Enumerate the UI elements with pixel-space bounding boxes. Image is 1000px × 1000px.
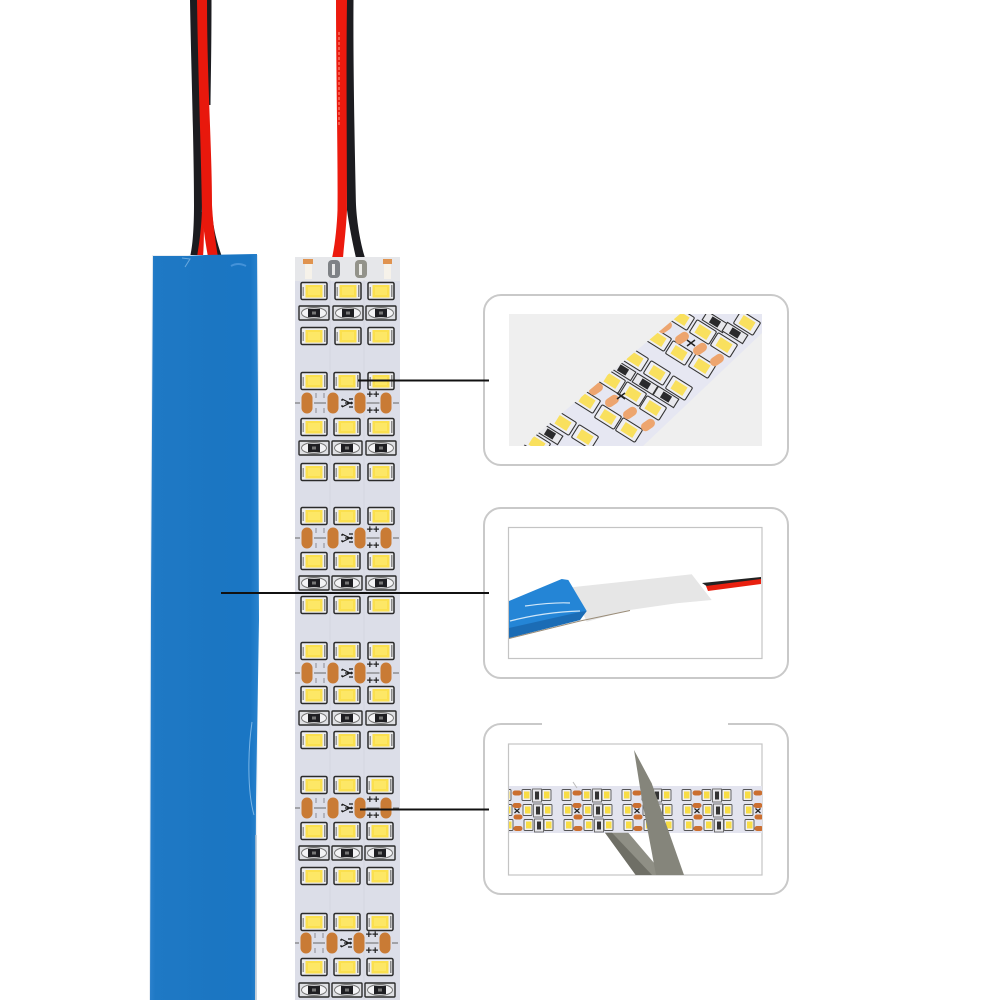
gap in panel top border bbox=[542, 721, 728, 727]
cut points with copper pads: ++ bbox=[366, 945, 378, 957]
horizontal LED strip bbox=[509, 786, 762, 833]
solder pads and wire ends bbox=[295, 257, 400, 281]
leader line: sleeve to panel two bbox=[221, 592, 489, 594]
wires: left pair to blue sleeve bbox=[190, 0, 222, 257]
photo frame bbox=[508, 528, 762, 658]
panel frame bbox=[484, 724, 788, 894]
leader line: strip to panel one bbox=[358, 380, 489, 382]
blue sleeve end bbox=[509, 579, 630, 638]
panel: cutting close-up bbox=[484, 721, 794, 894]
cut points with copper pads: ++ bbox=[367, 794, 379, 806]
scissors bbox=[573, 750, 684, 875]
cut points with copper pads: ++ bbox=[367, 675, 379, 687]
angled LED strip bbox=[524, 314, 762, 446]
LED and resistor rows bbox=[299, 282, 396, 997]
infographic canvas bbox=[149, 0, 789, 1000]
cut points with copper pads: ++ bbox=[367, 810, 379, 822]
strip circuit board bbox=[295, 257, 400, 1000]
cut points with copper pads: ++ bbox=[367, 405, 379, 417]
leader line: cut point to panel three bbox=[360, 808, 489, 810]
panel: silicone sleeve close-up bbox=[484, 508, 788, 678]
cut points with copper pads: ++ bbox=[367, 540, 379, 552]
cut points with copper pads: ++ bbox=[367, 524, 379, 536]
cut points with copper pads: ++ bbox=[367, 389, 379, 401]
photo frame bbox=[508, 744, 762, 875]
peeled white strip backing bbox=[572, 574, 712, 622]
panel frame bbox=[484, 295, 788, 465]
wires: right pair to LED strip bbox=[332, 0, 365, 258]
blue heat-shrink sleeve bbox=[149, 254, 259, 1000]
cut points with copper pads: ++ bbox=[366, 929, 378, 941]
cut points with copper pads: ++ bbox=[367, 659, 379, 671]
LED strip bbox=[294, 257, 400, 1000]
cut points with copper pads bbox=[294, 389, 399, 957]
close-up photo background bbox=[509, 314, 762, 446]
column divider traces bbox=[330, 280, 364, 1000]
wire ends bbox=[702, 577, 761, 591]
panel: strip close-up bbox=[484, 295, 788, 465]
panel frame bbox=[484, 508, 788, 678]
